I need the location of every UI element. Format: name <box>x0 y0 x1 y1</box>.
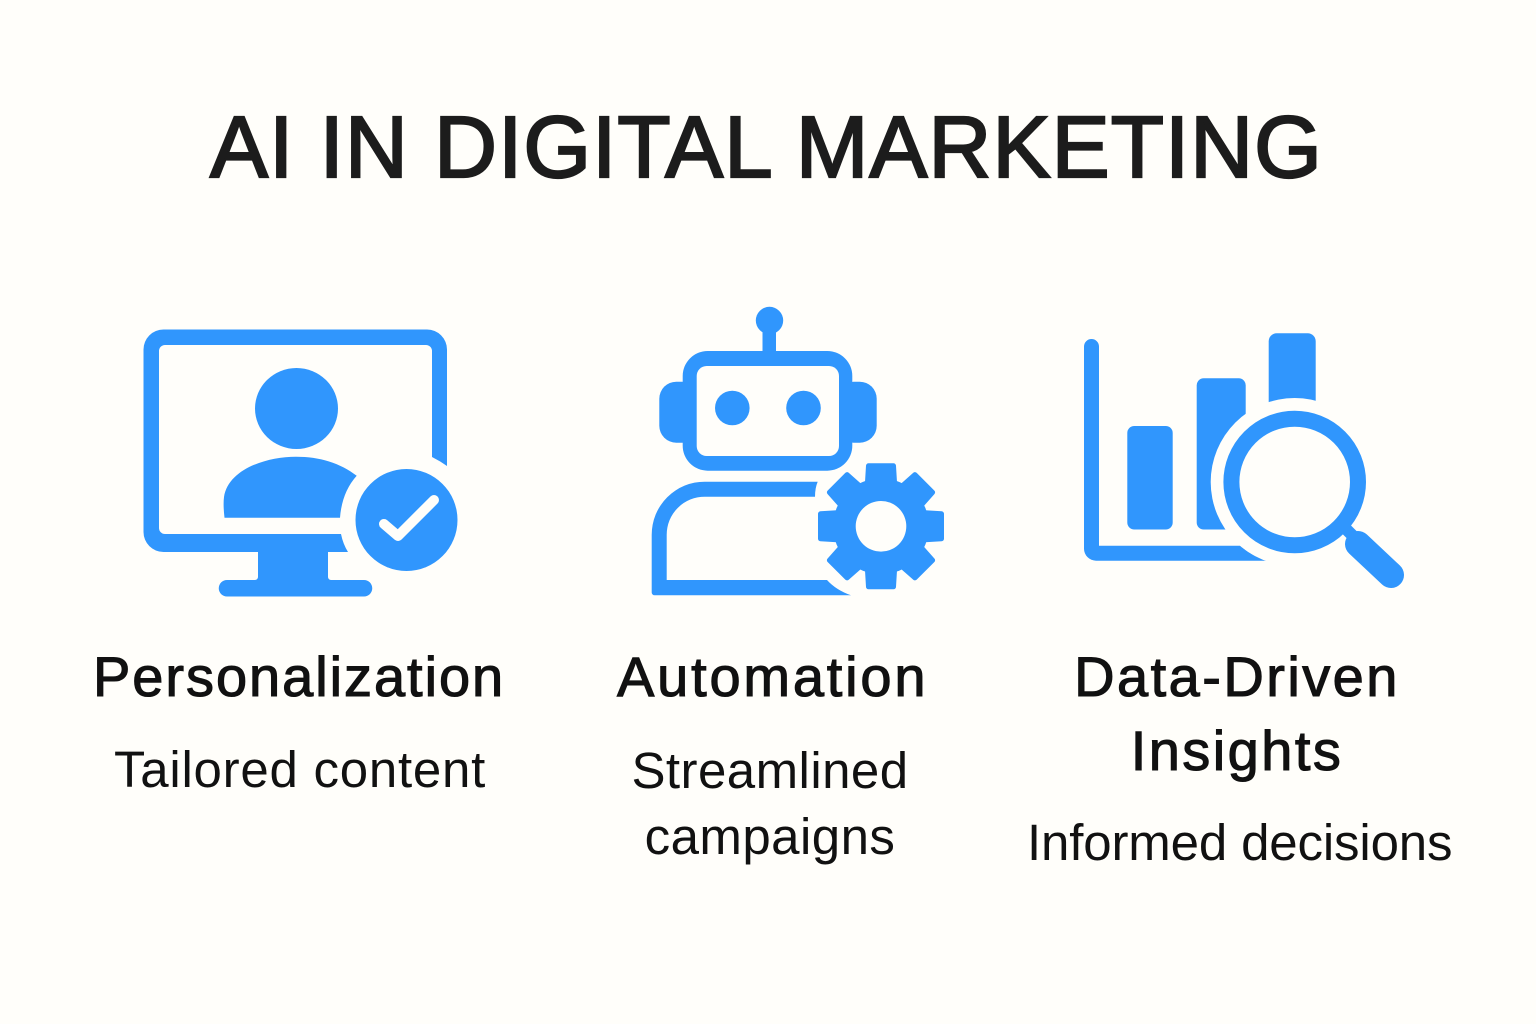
title: AI IN DIGITAL MARKETING <box>210 99 1323 196</box>
text: tailored content: Tailored content <box>114 741 486 798</box>
heading: data-driven insights: Data-Driven <box>1074 645 1400 708</box>
text: informed decisions: Informed decisions <box>1027 814 1452 871</box>
text: streamlined campaigns <box>631 742 909 865</box>
text: streamlined campaigns: Streamlined <box>631 742 909 799</box>
text: streamlined campaigns: campaigns <box>645 808 895 865</box>
heading: personalization: Personalization <box>93 645 505 708</box>
heading: automation: Automation <box>617 645 928 708</box>
heading: data-driven insights <box>1074 645 1400 782</box>
heading: data-driven insights: Insights <box>1131 719 1343 782</box>
